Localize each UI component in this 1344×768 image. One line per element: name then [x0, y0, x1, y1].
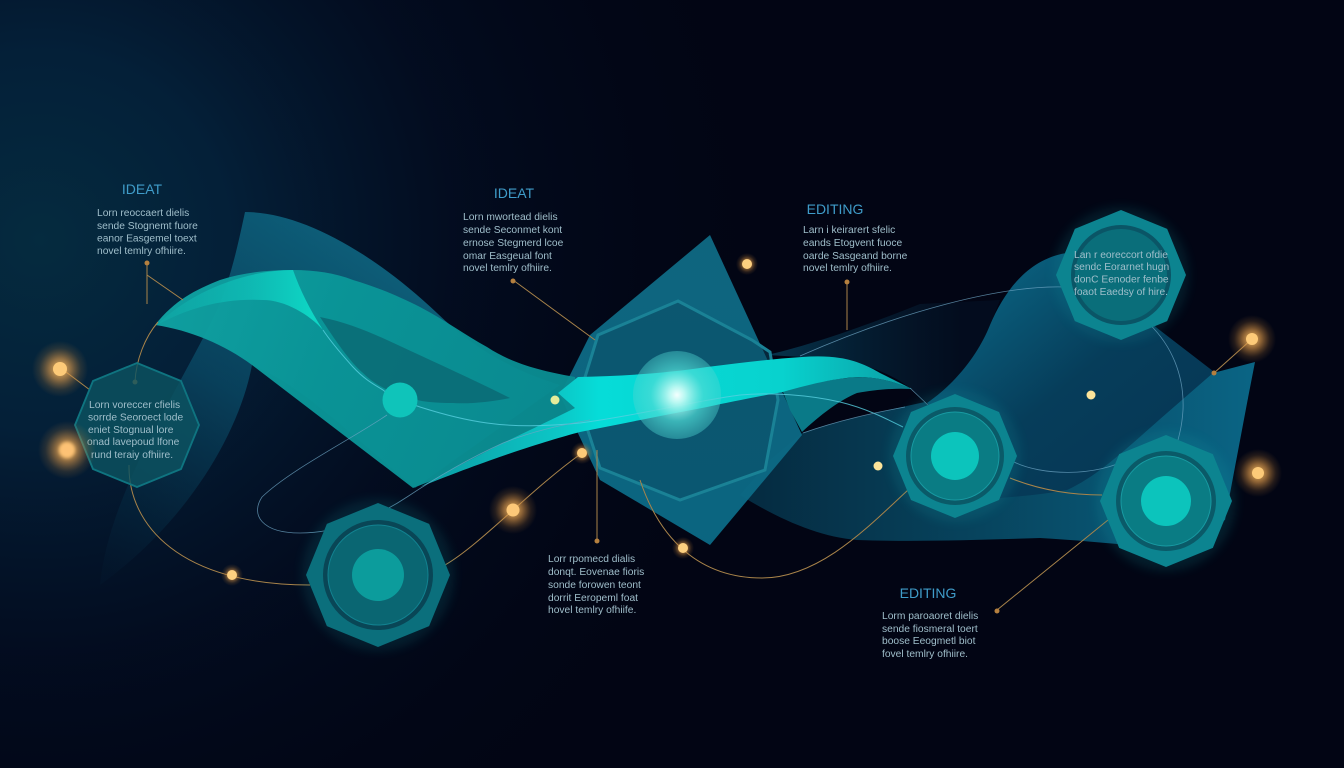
text: bottom center body: hovel temlry ofhiife. — [548, 605, 636, 616]
center glow — [633, 351, 721, 439]
text: top editing body: novel temlry ofhiire. — [803, 263, 892, 274]
text: top right octagon body: sendc Eorarnet hugn — [1074, 262, 1169, 273]
connector lines — [62, 260, 1252, 614]
node core — [931, 432, 979, 480]
label: bottom EDITING: EDITING — [900, 585, 956, 601]
label: top EDITING: EDITING — [807, 201, 863, 217]
text: bottom center body: donqt. Eovenae fioris — [548, 567, 644, 578]
ribbon: right blue wave back — [927, 252, 1248, 500]
ribbon: teal left wave — [155, 270, 580, 488]
text: center top body: novel temlry ofhiire. — [463, 263, 552, 274]
panel: center kite — [560, 235, 802, 545]
text: left octagon body: Lorn voreccer cfielis — [89, 400, 180, 411]
text: bottom center body: sonde forowen teont — [548, 580, 641, 591]
text: top left body: sende Stognemt fuore — [97, 221, 198, 232]
text: bottom editing body: Lorm paroaoret dielis — [882, 611, 978, 622]
text: top left body: novel temlry ofhiire. — [97, 246, 186, 257]
ribbon: lower right band under bright wave — [783, 377, 912, 432]
text: top left body: eanor Easgemel toext — [97, 234, 197, 244]
panel: center octagon — [578, 301, 778, 500]
text: bottom editing body: sende fiosmeral toert — [882, 624, 978, 635]
label: center IDEAT: IDEAT — [494, 185, 535, 201]
node: left text octagon — [75, 363, 199, 487]
label: center IDEAT — [463, 185, 564, 274]
text: top editing body: Larn i keirarert sfelic — [803, 225, 895, 236]
node: top right text octagon — [1053, 207, 1189, 343]
node: lower right octagon — [1096, 431, 1236, 571]
node core — [1141, 476, 1191, 526]
text: left octagon body: onad lavepoud lfone — [87, 437, 180, 448]
text: left octagon body: eniet Stognual lore — [88, 425, 174, 436]
node: bottom left octagon — [302, 499, 454, 651]
text: top editing body: eands Etogvent fuoce — [803, 238, 902, 249]
text: bottom editing body: fovel temlry ofhiire. — [882, 649, 968, 660]
label: bottom EDITING — [882, 585, 978, 660]
ribbon: faint upper right wash — [767, 300, 1000, 403]
ribbon: bright upper wedge — [157, 270, 323, 330]
text: bottom center body: Lorr rpomecd dialis — [548, 554, 635, 565]
text: center top body: omar Easgeual font — [463, 251, 552, 262]
label: top left IDEAT — [97, 181, 198, 257]
text: top right octagon body: foaot Eaedsy of hire. — [1074, 287, 1168, 298]
glowing dots — [32, 253, 1282, 586]
node: middle right octagon — [889, 390, 1021, 522]
text: center top body: sende Seconmet kont — [463, 225, 562, 236]
text: top left body: Lorn reoccaert dielis — [97, 208, 189, 219]
ribbon: right blue wave front — [740, 362, 1255, 548]
text: bottom editing body: boose Eeogmetl biot — [882, 636, 976, 647]
ribbon: back left blue wave — [100, 212, 560, 585]
text: left octagon body: rund teraiy ofhiire. — [91, 450, 173, 461]
text: center top body: Lorn mwortead dielis — [463, 212, 558, 223]
text: bottom center body: dorrit Eeropeml foat — [548, 593, 638, 604]
node core — [352, 549, 404, 601]
text: center top body: ernose Stegmerd lcoe — [463, 238, 564, 249]
text: top editing body: oarde Sasgeand borne — [803, 251, 908, 262]
label: top EDITING — [803, 201, 908, 274]
text: top right octagon body: Lan r eoreccort ofdie — [1074, 250, 1168, 261]
text: top right octagon body: donC Eenoder fenbe — [1074, 274, 1169, 286]
teal circle node — [382, 382, 418, 418]
text: left octagon body: sorrde Seoroect lode — [88, 412, 183, 424]
label: top left IDEAT: IDEAT — [122, 181, 163, 197]
ribbon: dark inner fold — [320, 317, 510, 403]
ribbon: bright center wave — [420, 356, 912, 487]
